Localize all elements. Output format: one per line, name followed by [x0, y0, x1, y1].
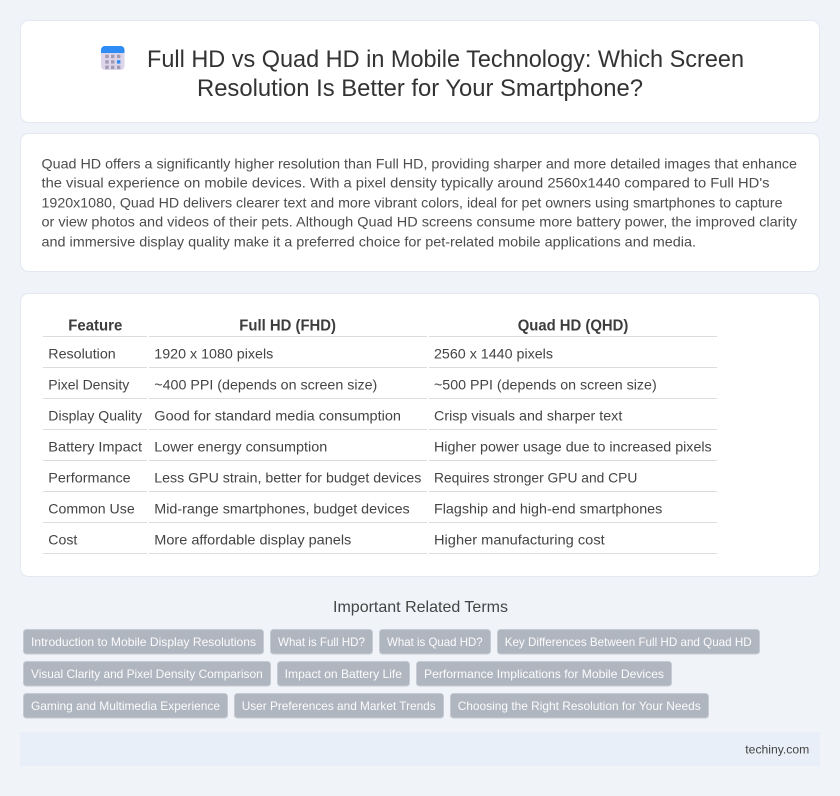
- tag: [270, 630, 372, 654]
- row: common use: [48, 500, 662, 516]
- tag: Performance Implications for Mobile Devices: [424, 667, 664, 681]
- text block: summary: the visual experience on mobile devices. With a pixel density typically around 2560x1440 compared to Full HD's: [42, 175, 769, 191]
- row: pixel density: [48, 376, 657, 392]
- row: battery impact: Lower energy consumption: [154, 438, 327, 454]
- row: performance: Performance: [48, 469, 131, 485]
- row: pixel density: ~400 PPI (depends on screen size): [154, 376, 377, 392]
- row: cost: More affordable display panels: [154, 531, 351, 547]
- tag: Gaming and Multimedia Experience: [31, 699, 220, 713]
- tag: User Preferences and Market Trends: [242, 699, 436, 713]
- text block: summary: 1920x1080, Quad HD delivers clearer text and more vibrant colors, ideal for pet owners using smartphones to capture: [42, 194, 783, 210]
- tag: [24, 662, 270, 686]
- row: resolution: 2560 x 1440 pixels: [434, 345, 553, 361]
- row: performance: Less GPU strain, better for budget devices: [154, 469, 421, 485]
- row: cost: Cost: [48, 531, 77, 547]
- table header row: Quad HD (QHD): [518, 318, 628, 335]
- row: resolution: Resolution: [48, 345, 116, 361]
- panel: comparison table: [20, 294, 820, 576]
- tag: [416, 662, 672, 686]
- tag: Key Differences Between Full HD and Quad HD: [505, 635, 752, 649]
- row: cost: Higher manufacturing cost: [434, 531, 605, 547]
- tag: Introduction to Mobile Display Resolutions: [31, 635, 256, 649]
- text block: summary: or view photos and videos of their pets. Although Quad HD screens consume more battery power, the improved clarity: [42, 214, 797, 230]
- table header row: Full HD (FHD): [239, 318, 336, 335]
- row: performance: [48, 469, 637, 485]
- tag: [24, 630, 264, 654]
- tag: Visual Clarity and Pixel Density Comparison: [31, 667, 263, 681]
- panel: title header: [20, 20, 820, 122]
- tag: [24, 694, 228, 718]
- row: display quality: Good for standard media consumption: [154, 407, 401, 423]
- tag: What is Full HD?: [278, 635, 365, 649]
- tag: Choosing the Right Resolution for Your Needs: [458, 699, 701, 713]
- text block: summary: and immersive display quality make it a preferred choice for pet-related mobile applications and media.: [42, 233, 696, 249]
- table header row: [68, 318, 628, 335]
- tag: [450, 694, 708, 718]
- title: Resolution Is Better for Your Smartphone?: [197, 75, 643, 102]
- table header row: Feature: [68, 318, 122, 335]
- row: common use: Common Use: [48, 500, 135, 516]
- row: resolution: [48, 345, 553, 361]
- title: [147, 46, 744, 102]
- row: battery impact: [48, 438, 712, 454]
- row: display quality: Crisp visuals and sharper text: [434, 407, 622, 423]
- row: cost: [48, 531, 605, 547]
- row: common use: Flagship and high-end smartphones: [434, 500, 662, 516]
- row: pixel density: ~500 PPI (depends on screen size): [434, 376, 657, 392]
- tag list: related terms: [24, 630, 760, 718]
- row: common use: Mid-range smartphones, budget devices: [154, 500, 410, 516]
- tag: [278, 662, 410, 686]
- footer credit: techiny.com: [745, 742, 809, 756]
- panel: summary paragraph: [20, 134, 820, 272]
- row: resolution: 1920 x 1080 pixels: [154, 345, 273, 361]
- row: battery impact: Battery Impact: [48, 438, 142, 454]
- row: pixel density: Pixel Density: [48, 376, 129, 392]
- row: display quality: Display Quality: [48, 407, 142, 423]
- footer: [20, 732, 820, 766]
- tag: [234, 694, 444, 718]
- tag: What is Quad HD?: [387, 635, 483, 649]
- title: Full HD vs Quad HD in Mobile Technology: Which Screen: [147, 46, 744, 73]
- text block: summary: Quad HD offers a significantly higher resolution than Full HD, providing sharper and more detailed images that enhance: [42, 155, 797, 171]
- row: battery impact: Higher power usage due to increased pixels: [434, 438, 712, 454]
- row: display quality: [48, 407, 622, 423]
- tag: [498, 630, 760, 654]
- heading: important related terms: Important Related Terms: [333, 599, 508, 616]
- tag: [380, 630, 490, 654]
- text block: summary: [42, 155, 797, 249]
- icon: calendar grid: [101, 46, 124, 70]
- tag: Impact on Battery Life: [285, 667, 402, 681]
- row: performance: Requires stronger GPU and CPU: [434, 469, 637, 485]
